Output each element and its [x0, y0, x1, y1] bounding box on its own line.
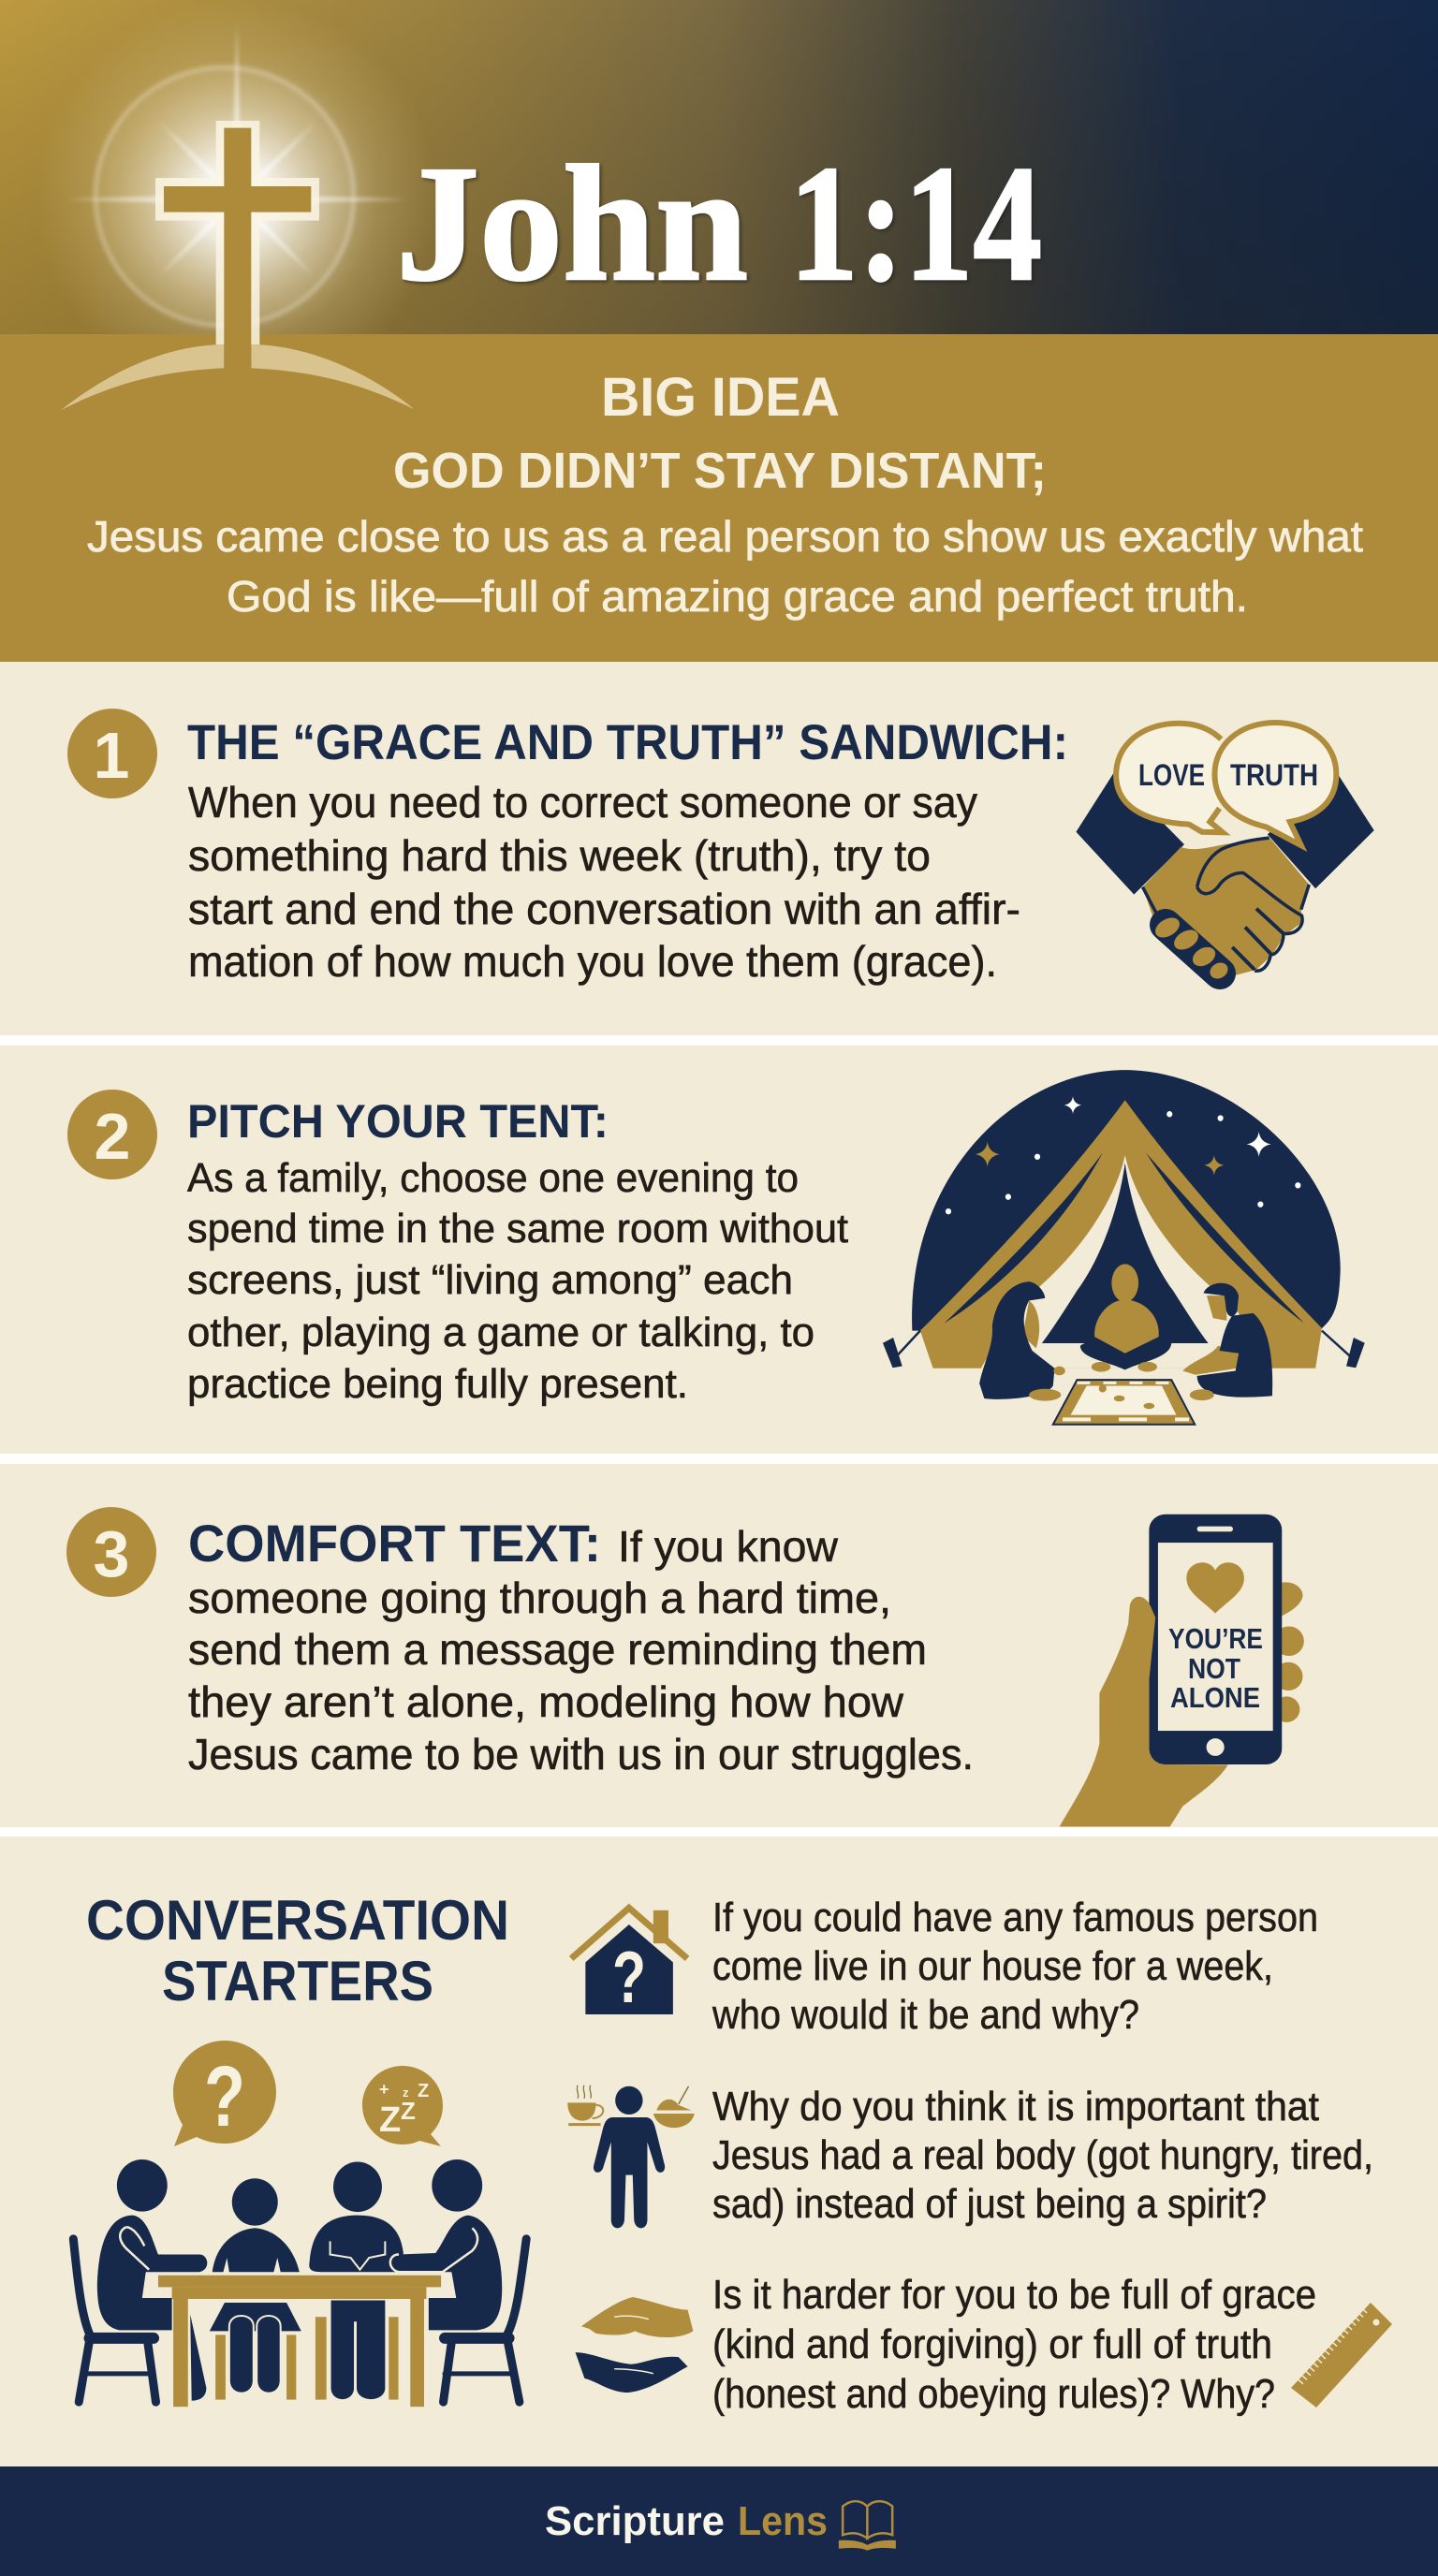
icon: family around table [73, 2159, 526, 2407]
number badge 2: 2 [95, 1100, 130, 1173]
header banner [0, 0, 1438, 334]
heading: PITCH YOUR TENT: [187, 1095, 609, 1148]
person 2 [210, 2178, 301, 2393]
body text: If you know [618, 1522, 839, 1571]
icon: speech bubble sleeping: Z [401, 2097, 416, 2125]
question text: Jesus had a real body (got hungry, tired, [712, 2132, 1373, 2178]
icon: open book [839, 2501, 896, 2551]
body text: Jesus came to be with us in our struggles. [188, 1730, 974, 1778]
question text [712, 1895, 1318, 2038]
icon: speech bubble question [173, 2041, 276, 2146]
tent canvas [920, 1100, 1322, 1368]
icon: cross on hill [61, 121, 415, 410]
icon: heart [1186, 1562, 1244, 1614]
icon: hand holding phone [1060, 1515, 1304, 1827]
body text [188, 778, 1020, 986]
seated man [1182, 1283, 1272, 1400]
icon: speech bubble sleeping: + [379, 2080, 389, 2099]
icon: house with question mark: ? [612, 1936, 646, 2018]
icon: radiant glow behind cross [59, 22, 415, 334]
subheading: GOD DIDN’T STAY DISTANT; [393, 443, 1047, 499]
phone message: NOT [1188, 1652, 1240, 1685]
panel: conversation starters [0, 1837, 1438, 2576]
number badge 3 [66, 1507, 156, 1597]
body text [188, 1522, 974, 1778]
icon: speech bubble question: ? [204, 2049, 245, 2144]
panel: big idea band [0, 334, 1438, 662]
body text: mation of how much you love them (grace). [188, 937, 997, 986]
heading: COMFORT TEXT: [188, 1514, 601, 1573]
question text [712, 2084, 1373, 2227]
person 1 [97, 2159, 207, 2401]
left chair [73, 2239, 155, 2402]
seated center person [1080, 1264, 1171, 1372]
panel: action 1 grace and truth sandwich [0, 662, 1438, 1035]
starter question 2 [567, 2084, 1373, 2228]
body text: screens, just “living among” each [187, 1257, 793, 1303]
right chair [444, 2239, 526, 2402]
stars [946, 1096, 1300, 1214]
body text [187, 1155, 848, 1407]
icon: ruler [1291, 2303, 1392, 2408]
icon: speech bubble sleeping [362, 2066, 443, 2146]
heading [86, 1889, 509, 2012]
icon: handshake with speech bubbles: TRUTH [1230, 758, 1318, 792]
question text: (kind and forgiving) or full of truth [712, 2321, 1272, 2367]
phone message [1168, 1622, 1263, 1714]
number badge 2 [67, 1090, 157, 1179]
question text: who would it be and why? [712, 1992, 1139, 2038]
body text: practice being fully present. [187, 1361, 688, 1407]
body text: When you need to correct someone or say [188, 778, 977, 827]
fingers [1273, 1582, 1304, 1722]
number badge 1: 1 [94, 719, 129, 792]
LOVE bubble [1116, 724, 1223, 832]
icon: house with question mark [571, 1908, 687, 2018]
panel: action 2 pitch your tent [0, 1046, 1438, 1454]
question text [712, 2272, 1316, 2417]
tent opening [981, 1155, 1272, 1368]
icon: speech bubble sleeping: Z [379, 2100, 401, 2140]
big idea statement: Jesus came close to us as a real person to show us exactly what [87, 512, 1363, 561]
icon: speech bubble sleeping: Z [418, 2081, 429, 2101]
question text: sad) instead of just being a spirit? [712, 2181, 1267, 2227]
question text: (honest and obeying rules)? Why? [712, 2371, 1275, 2417]
fingers of left hand [1152, 914, 1231, 982]
seated woman [979, 1281, 1065, 1401]
right sleeve [1268, 771, 1374, 888]
palm and thumb [1060, 1597, 1228, 1827]
footer: Lens [738, 2498, 828, 2544]
number badge 1 [67, 709, 157, 798]
body text: something hard this week (truth), try to [188, 831, 931, 880]
body text: spend time in the same room without [187, 1206, 848, 1251]
gold chairs behind table [215, 2317, 399, 2400]
tent stakes [884, 1331, 1364, 1368]
title [396, 132, 1042, 315]
title: 1:14 [789, 132, 1042, 315]
table [158, 2276, 441, 2407]
body text: other, playing a game or talking, to [187, 1310, 814, 1355]
big idea statement: God is like—full of amazing grace and perfect truth. [227, 572, 1248, 621]
person 3 [309, 2162, 404, 2399]
icon: family in tent under night sky [884, 1070, 1364, 1425]
phone message: ALONE [1170, 1681, 1260, 1714]
person 4 [390, 2159, 502, 2330]
title: John [396, 132, 748, 315]
heading: STARTERS [162, 1950, 433, 2012]
body text: someone going through a hard time, [188, 1573, 891, 1622]
icon: speech bubble sleeping: z [403, 2086, 409, 2100]
heading: big idea: BIG IDEA [601, 367, 840, 428]
body text: they aren’t alone, modeling how how [188, 1677, 904, 1726]
night sky dome [912, 1070, 1341, 1331]
question text: If you could have any famous person [712, 1895, 1318, 1940]
left sleeve [1076, 773, 1184, 895]
panel: action 3 comfort text [0, 1464, 1438, 1827]
question text: Why do you think it is important that [712, 2084, 1319, 2130]
heading: CONVERSATION [86, 1889, 509, 1952]
icon: handshake with speech bubbles: LOVE [1138, 758, 1205, 792]
heading: THE “GRACE AND TRUTH” SANDWICH: [187, 715, 1068, 770]
game board [1053, 1380, 1195, 1425]
clasped gold hands [1143, 837, 1309, 980]
starter question 1 [571, 1895, 1318, 2038]
icon: open hands [576, 2297, 693, 2393]
brand name: Scripture [545, 2498, 725, 2544]
body text: start and end the conversation with an affir- [188, 885, 1020, 933]
icon: person with cup and bowl [567, 2086, 695, 2228]
starter question 3 [576, 2272, 1392, 2417]
phone body [1149, 1515, 1282, 1764]
question text: Is it harder for you to be full of grace [712, 2272, 1316, 2318]
body text: As a family, choose one evening to [187, 1155, 799, 1201]
icon: handshake with speech bubbles [1076, 723, 1374, 982]
number badge 3: 3 [94, 1517, 129, 1590]
footer [0, 2466, 1438, 2576]
phone message: YOU’RE [1168, 1622, 1263, 1655]
body text: send them a message reminding them [188, 1625, 927, 1674]
question text: come live in our house for a week, [712, 1943, 1273, 1989]
big idea statement [87, 512, 1363, 621]
TRUTH bubble [1214, 723, 1336, 845]
